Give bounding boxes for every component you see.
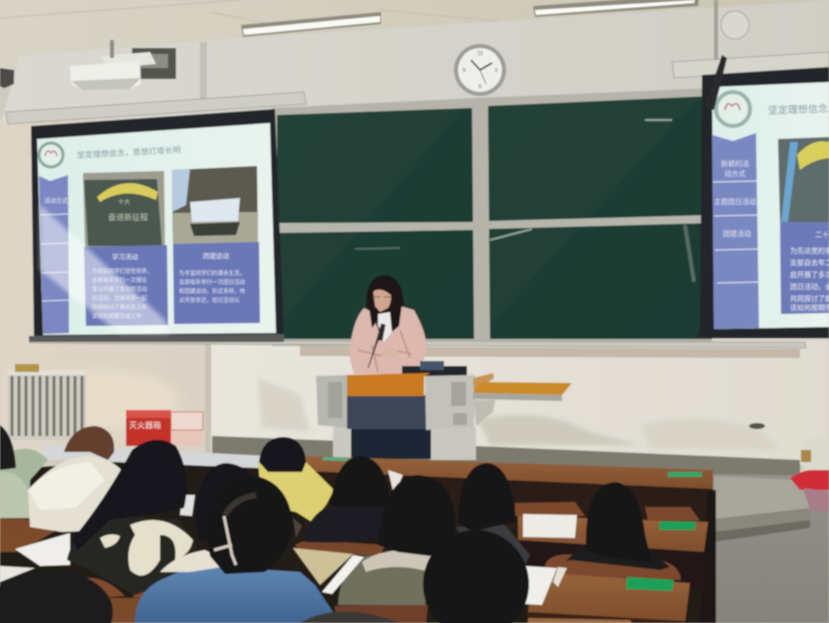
student: short hair, bottom left: [0, 570, 113, 623]
speaker hand: [382, 348, 398, 358]
speaker shirt: [378, 312, 392, 342]
speaker coat shading: [358, 330, 412, 372]
open book: [293, 548, 364, 594]
podium right panel: [425, 375, 475, 430]
left slide caption box 1: 支部每天举行一次理论: [92, 276, 148, 284]
left projection screen: [29, 109, 284, 342]
student: dark head at bottom edge: [300, 612, 400, 623]
left slide photo: group outdoors: [172, 166, 258, 246]
podium left panel: [316, 375, 348, 428]
front desk row: [42, 444, 713, 530]
ceiling light right: [533, 0, 700, 17]
wall notice: [171, 412, 203, 446]
chalk tray: [30, 340, 806, 348]
left slide caption box 1: 日活动，全体同学一起: [92, 294, 148, 302]
left slide photo: blackboard art: 奋进新征程: [108, 212, 148, 222]
dark seating area base: [0, 462, 716, 623]
student: cream hooded jacket: [28, 426, 127, 532]
right slide caption box: 二十: [815, 230, 829, 239]
podium bracket: [473, 373, 494, 392]
floor step: [714, 476, 810, 542]
left slide photo: blackboard art: 十大: [118, 198, 130, 206]
second desk row right: [515, 502, 708, 590]
podium navy panel: [347, 395, 426, 429]
left desks and chairs: [0, 518, 155, 623]
wall wear patches: [20, 370, 780, 450]
hanging microphone: [704, 55, 727, 110]
upper right trim rail: [672, 52, 829, 78]
smoke detector: [714, 0, 749, 60]
left slide logo: [39, 143, 63, 167]
projector: [70, 40, 176, 90]
podium side shelf: [473, 382, 572, 395]
speaker glasses: [373, 296, 391, 298]
right slide sidebar: [712, 133, 759, 329]
wall camera: [0, 68, 14, 88]
right slide background: [712, 82, 829, 329]
left slide sidebar: 活动方式: [44, 197, 68, 205]
third desk row right: [524, 554, 690, 623]
right slide photo: [778, 137, 829, 222]
speaker hair back: [366, 275, 410, 334]
blackboard right: [488, 96, 712, 339]
speaker at podium: [350, 275, 426, 374]
wall clock: 12: [477, 51, 483, 57]
left slide photo: blackboard art: [83, 171, 165, 248]
left slide caption box 1: 该如何按期完成工作: [92, 312, 142, 320]
wall clock: 6: [479, 84, 482, 90]
floor: [712, 474, 829, 623]
left slide caption box 2: 支部每年举行一次团日活动: [179, 278, 246, 286]
left slide caption box 2: [173, 242, 260, 324]
fire extinguisher box: [126, 410, 171, 446]
wall trim rail: [6, 92, 306, 124]
wall clock: 3: [495, 68, 498, 74]
student: dark bob hair in black puffer: [305, 456, 403, 543]
student: grey jacket, front right: [456, 463, 530, 565]
student: yellow jacket: [258, 437, 334, 522]
wall clock: 9: [463, 68, 466, 74]
fire extinguisher box: 灭火器箱: [129, 420, 161, 430]
left slide caption box 1: 学习开展了多次的活动: [92, 285, 148, 293]
right slide sidebar: 团建活动: [723, 229, 751, 238]
upper wall: [0, 0, 829, 125]
right slide caption box: [780, 222, 829, 314]
ceiling light left: [241, 12, 381, 37]
speaker hair strands: [368, 298, 402, 332]
student: long-haired, black and white sweater: [67, 440, 196, 595]
ceiling: [0, 0, 829, 70]
right slide sidebar: 主题团日活动: [714, 197, 756, 206]
radiator: [8, 364, 86, 440]
wall dado: [212, 436, 800, 478]
speaker microphone: [368, 324, 385, 368]
left slide caption box 2: 为丰富同学们的课余生活，: [179, 269, 245, 277]
student: dark head behind: [195, 463, 255, 540]
desk side panel: [700, 490, 716, 623]
student: green jacket far left: [0, 425, 48, 518]
left slide title: 坚定理想信念，思想灯塔长明: [77, 145, 181, 160]
left slide sun glare: [40, 205, 170, 334]
tan band under board: [300, 346, 800, 358]
blackboard left: [277, 108, 474, 339]
left slide caption box 1: [84, 245, 168, 326]
lower wall right: [208, 340, 829, 465]
wall column: [205, 344, 211, 454]
lower wall left: [0, 120, 215, 460]
right slide logo: [716, 92, 750, 126]
podium monitor: [402, 361, 467, 376]
speaker coat: [350, 306, 426, 374]
podium legs: [333, 427, 353, 458]
wall clock: [454, 44, 506, 96]
left slide caption box 2: 点开放亲近，班日活动以: [179, 296, 240, 304]
left slide caption box 1: 学习活动: [112, 252, 138, 261]
blackboard frame: [272, 88, 712, 346]
podium orange top: [347, 373, 430, 396]
waste bin: [790, 438, 829, 511]
right slide sidebar: 动方式: [724, 169, 746, 178]
conduit: [200, 42, 207, 100]
podium: [316, 373, 572, 460]
left slide caption box 1: 为提高同学们党性修养，: [92, 267, 153, 275]
student: blue jacket with hair clip: [135, 475, 335, 623]
left slide caption box 2: 团建运动: [203, 251, 230, 260]
right projection screen: [696, 67, 829, 338]
paper behind students: [180, 495, 195, 516]
student: short hair, bottom centre: [423, 530, 529, 623]
student: olive coat with fur collar: [338, 475, 456, 605]
student: long hair, back row right: [565, 482, 670, 570]
left slide background: [37, 123, 276, 335]
left slide sidebar: [39, 175, 69, 334]
speaker face: [373, 286, 391, 312]
left slide caption box 2: 和团建运动，形式多样，地: [179, 287, 246, 295]
left slide caption box 1: 共同探讨了相关的工作: [92, 303, 148, 311]
speaker fringe: [369, 281, 397, 310]
middle chairs: [295, 540, 428, 623]
right slide sidebar: 新颖的活: [721, 159, 749, 168]
